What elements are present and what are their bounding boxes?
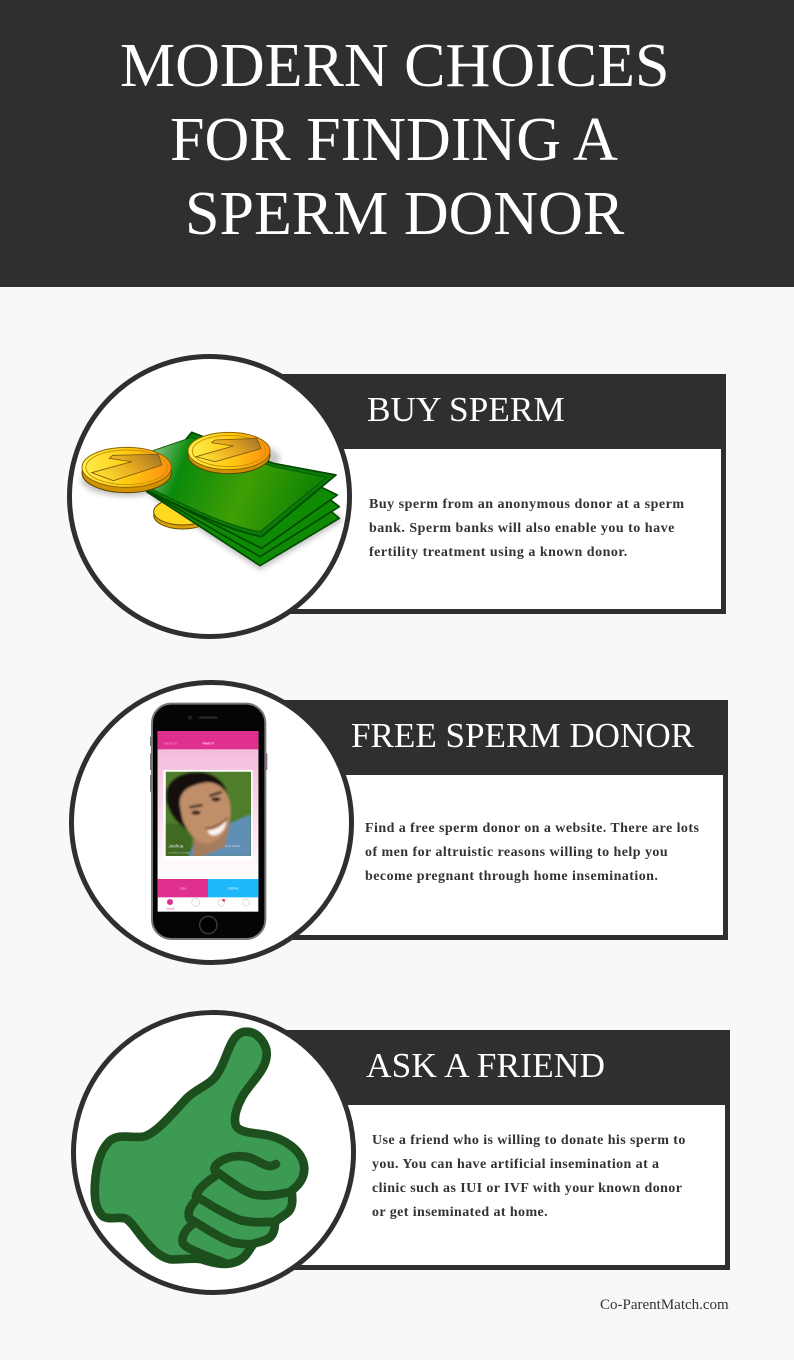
title: FOR FINDING A bbox=[170, 106, 618, 174]
coin: left bbox=[82, 447, 171, 493]
panel: ask a friend bbox=[284, 1030, 730, 1270]
header banner bbox=[0, 0, 794, 287]
text: ask a friend: Use a friend who is willing to donate his sperm to bbox=[372, 1133, 686, 1148]
phone screen: Match bbox=[203, 741, 215, 746]
phone screen: Like bbox=[180, 887, 186, 891]
phone screen bbox=[158, 731, 258, 912]
profile photo: view Profile bbox=[225, 844, 241, 848]
phone screen: Search bbox=[164, 741, 177, 746]
text: buy sperm bbox=[369, 497, 685, 560]
text: free sperm donor: of men for altruistic reasons willing to help you bbox=[365, 845, 668, 860]
text: free sperm donor: become pregnant through home insemination. bbox=[365, 869, 658, 884]
panel: buy sperm bbox=[280, 374, 726, 614]
icon: money and coins bbox=[79, 432, 344, 572]
phone side buttons bbox=[150, 737, 267, 792]
panel: free sperm donor bbox=[282, 700, 728, 940]
coin: under bills bbox=[154, 498, 212, 529]
footer credit: Co-ParentMatch.com bbox=[600, 1297, 729, 1313]
coin: right bbox=[188, 432, 270, 474]
title: MODERN CHOICES bbox=[120, 32, 669, 100]
text: ask a friend: or get inseminated at home. bbox=[372, 1205, 548, 1220]
circle: thumbs up bbox=[71, 1010, 356, 1294]
profile photo: Looking to Donate bbox=[168, 850, 190, 854]
phone screen: Dislike bbox=[228, 887, 239, 891]
text: ask a friend: you. You can have artificial insemination at a bbox=[372, 1157, 659, 1172]
circle: money bbox=[67, 354, 352, 638]
heading: buy sperm: BUY SPERM bbox=[367, 390, 565, 429]
phone screen: Search bbox=[166, 906, 175, 910]
title bbox=[120, 32, 669, 248]
text: free sperm donor bbox=[365, 821, 699, 884]
profile photo bbox=[166, 772, 251, 857]
heading: free sperm donor: FREE SPERM DONOR bbox=[351, 716, 694, 755]
text: free sperm donor: Find a free sperm donor on a website. There are lots bbox=[365, 821, 699, 836]
title: SPERM DONOR bbox=[185, 180, 624, 248]
phone body bbox=[152, 704, 265, 939]
heading: ask a friend: ASK A FRIEND bbox=[366, 1046, 605, 1085]
icon: phone app bbox=[150, 702, 268, 940]
icon: thumbs up bbox=[90, 1027, 309, 1268]
bill stack bbox=[145, 432, 339, 566]
text: buy sperm: Buy sperm from an anonymous donor at a sperm bbox=[369, 497, 685, 512]
text: buy sperm: bank. Sperm banks will also enable you to have bbox=[369, 521, 675, 536]
circle: phone bbox=[69, 680, 354, 964]
profile photo: Joshua bbox=[168, 843, 184, 848]
text: ask a friend bbox=[372, 1133, 686, 1220]
text: buy sperm: fertility treatment using a known donor. bbox=[369, 545, 628, 560]
text: ask a friend: clinic such as IUI or IVF with your known donor bbox=[372, 1181, 682, 1196]
